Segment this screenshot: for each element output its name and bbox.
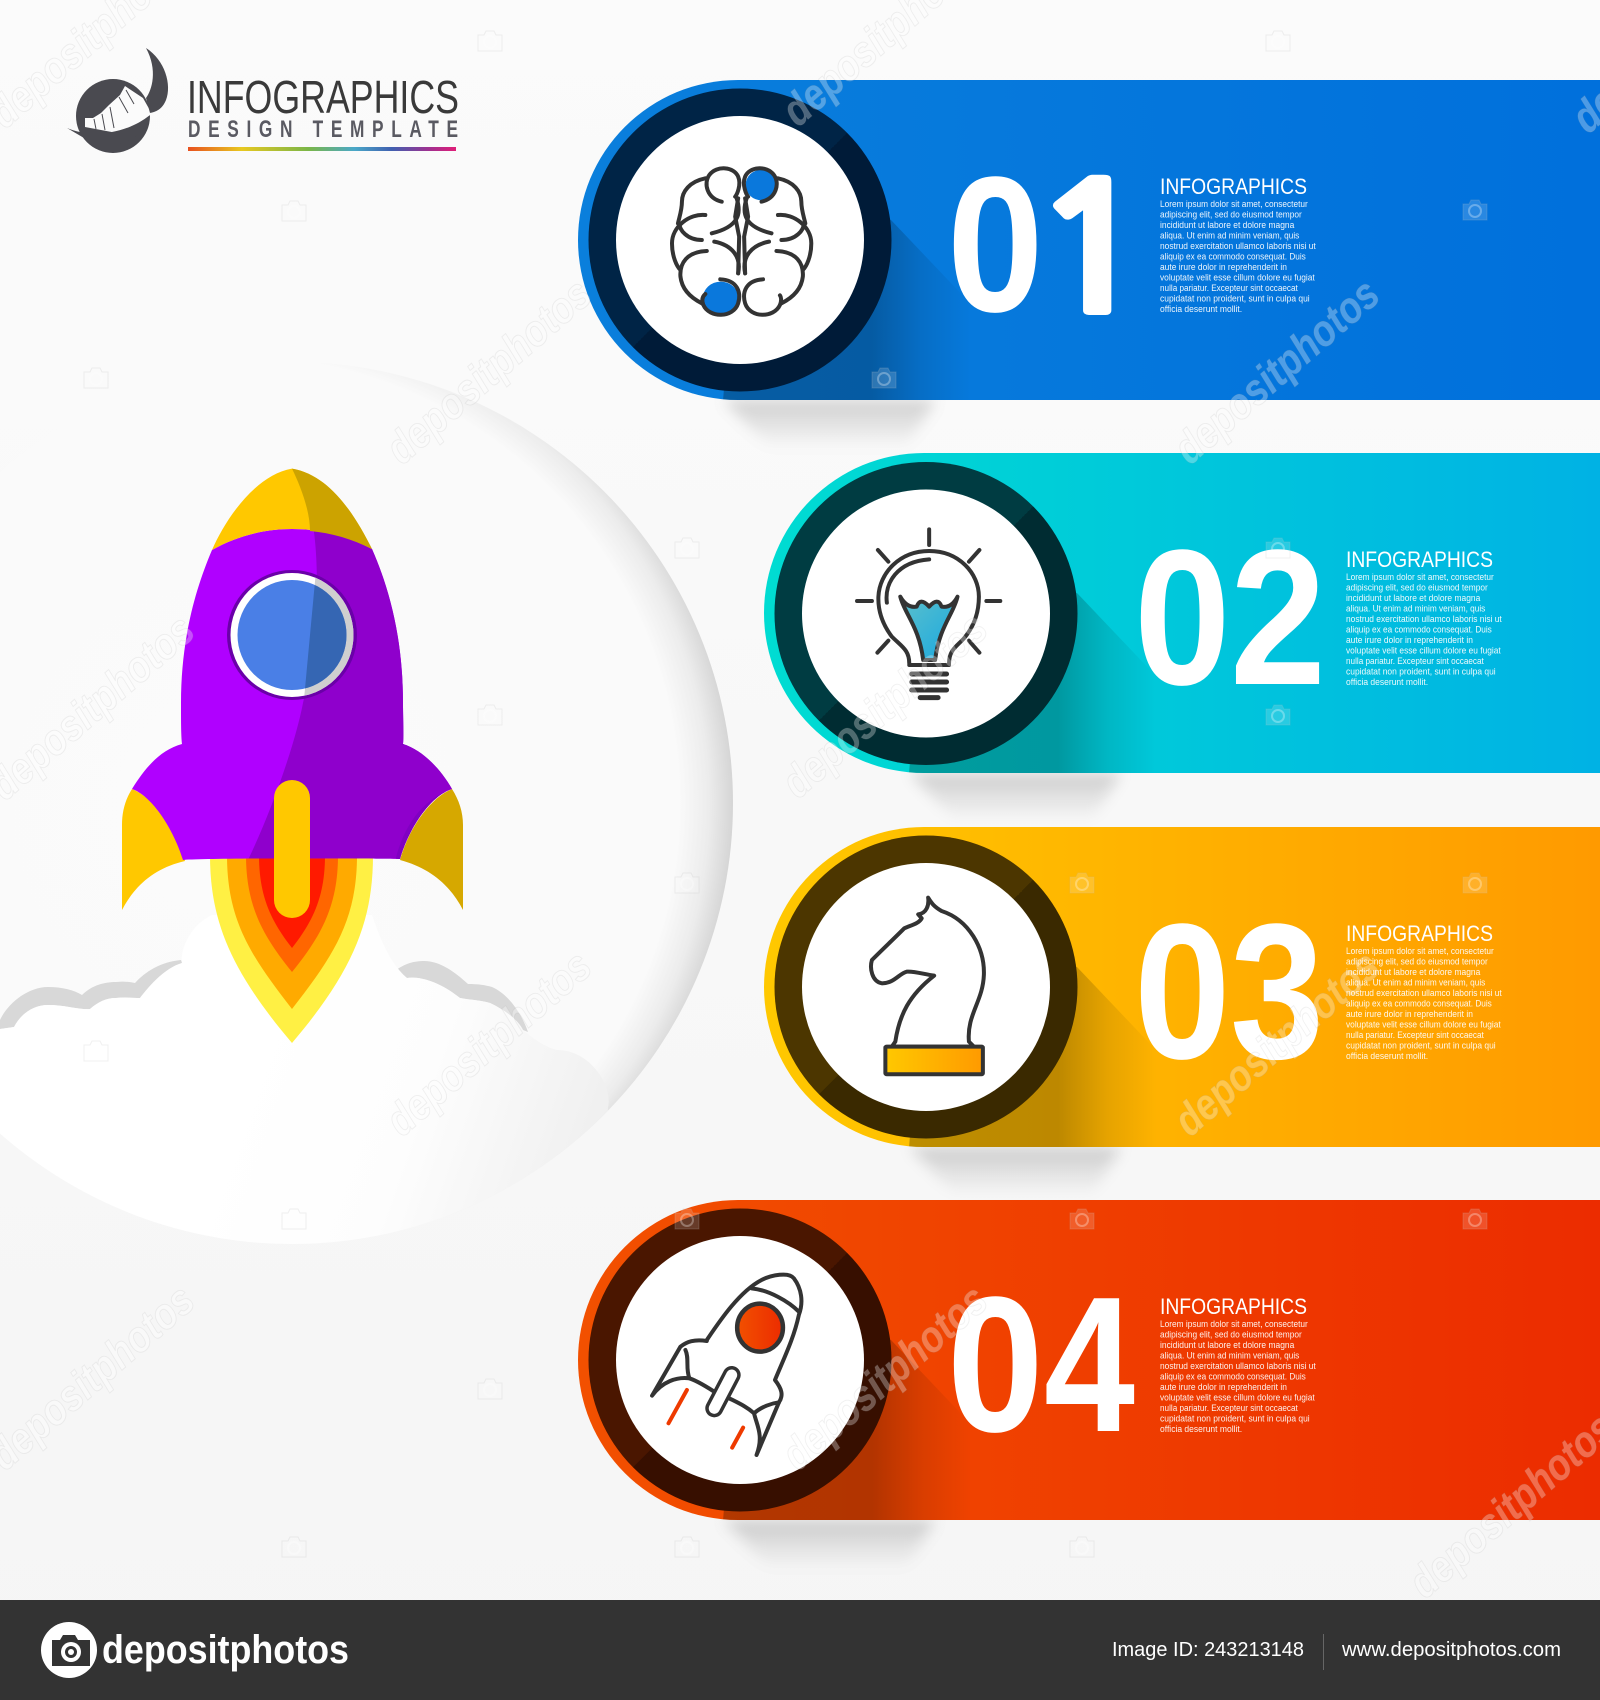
text block 02: adipiscing elit, sed do eiusmod tempor [1346, 582, 1488, 594]
text block 04: aliqua. Ut enim ad minim veniam, quis [1160, 1350, 1299, 1362]
footer wordmark: depositphotos [102, 1628, 349, 1672]
rocket fins [122, 789, 463, 910]
panel: step 03 [764, 827, 1600, 1195]
footer image id: Image ID: 243213148 [1112, 1639, 1304, 1661]
text block 02: nostrud exercitation ullamco laboris nisi ut [1346, 614, 1502, 625]
text block 03: nostrud exercitation ullamco laboris nisi ut [1346, 988, 1502, 999]
text block 03: nulla pariatur. Excepteur sint occaecat [1346, 1030, 1484, 1041]
text block 03: aliqua. Ut enim ad minim veniam, quis [1346, 978, 1485, 988]
panel: large paper circle [0, 362, 733, 1244]
number 04 [947, 1256, 1135, 1472]
text block 01: Lorem ipsum dolor sit amet, consectetur [1160, 199, 1308, 210]
watermarks: depositphotos [376, 941, 601, 1146]
text block 01: adipiscing elit, sed do eiusmod tempor [1160, 210, 1302, 220]
logo subtitle: DESIGN TEMPLATE [188, 116, 458, 143]
text block 01: aliqua. Ut enim ad minim veniam, quis [1160, 230, 1299, 242]
icon: brain [672, 168, 811, 315]
icon: chess knight [871, 898, 984, 1074]
rocket flame [210, 855, 373, 1043]
text block 01: nulla pariatur. Excepteur sint occaecat [1160, 283, 1298, 294]
text block 03: INFOGRAPHICS [1346, 921, 1493, 946]
number 04: 4 [1044, 1256, 1135, 1472]
watermarks: depositphotos [1164, 941, 1389, 1146]
text block 01: incididunt ut labore et dolore magna [1160, 220, 1295, 231]
icon: outline rocket [652, 1275, 801, 1455]
text block 02: aliqua. Ut enim ad minim veniam, quis [1346, 604, 1485, 614]
panel: step 01 [578, 80, 1600, 448]
number 01 [947, 136, 1156, 352]
text block 02: officia deserunt mollit. [1346, 677, 1428, 688]
text block 01: officia deserunt mollit. [1160, 304, 1242, 315]
text block 02: INFOGRAPHICS [1346, 547, 1493, 572]
text block 01: cupidatat non proident, sunt in culpa qui [1160, 294, 1310, 304]
text block 03: aliquip ex ea commodo consequat. Duis [1346, 998, 1492, 1010]
icon: light bulb [857, 529, 1000, 698]
number 02: 0 [1134, 509, 1231, 725]
text block 02: nulla pariatur. Excepteur sint occaecat [1346, 656, 1484, 667]
text block 04: voluptate velit esse cillum dolore eu fugiat [1160, 1392, 1315, 1404]
logo mark [67, 48, 168, 153]
text block 04: aute irure dolor in reprehenderit in [1160, 1382, 1287, 1393]
text block 01: nostrud exercitation ullamco laboris nisi ut [1160, 241, 1316, 252]
text block 02: aliquip ex ea commodo consequat. Duis [1346, 624, 1492, 636]
watermarks: depositphotos [772, 1275, 997, 1480]
rainbow bar [188, 147, 456, 151]
illustration: purple rocket [122, 469, 470, 1043]
footer bar [0, 1600, 1600, 1700]
number 03 [1134, 883, 1324, 1099]
rocket body [132, 520, 470, 862]
text block 02: Lorem ipsum dolor sit amet, consectetur [1346, 572, 1494, 583]
text block 01: aute irure dolor in reprehenderit in [1160, 262, 1287, 273]
rocket thruster tube [274, 780, 310, 918]
text block 02: incididunt ut labore et dolore magna [1346, 593, 1481, 604]
text block 02: cupidatat non proident, sunt in culpa qui [1346, 666, 1496, 678]
text block 03: officia deserunt mollit. [1346, 1051, 1428, 1062]
watermarks: depositphotos [1164, 269, 1389, 474]
rocket nose [212, 469, 372, 550]
logo title: INFOGRAPHICS [187, 71, 459, 123]
number 01: 0 [947, 136, 1044, 352]
text block 04: incididunt ut labore et dolore magna [1160, 1340, 1295, 1351]
number 01: 1 [1029, 162, 1156, 339]
number 03: 3 [1230, 883, 1324, 1099]
text block 01: aliquip ex ea commodo consequat. Duis [1160, 252, 1306, 262]
icon: footer camera logo [41, 1622, 97, 1678]
rocket window [227, 570, 357, 700]
text block 04: aliquip ex ea commodo consequat. Duis [1160, 1372, 1306, 1382]
text block 03: voluptate velit esse cillum dolore eu fugiat [1346, 1020, 1501, 1030]
number 02: 2 [1230, 509, 1326, 725]
text block 01: INFOGRAPHICS [1160, 174, 1307, 199]
watermarks: depositphotos [772, 603, 997, 808]
text block 03 [1346, 921, 1502, 1062]
panel: step 04 [578, 1200, 1600, 1568]
text block 03: Lorem ipsum dolor sit amet, consectetur [1346, 946, 1494, 957]
text block 03: adipiscing elit, sed do eiusmod tempor [1346, 956, 1488, 968]
text block 04: nulla pariatur. Excepteur sint occaecat [1160, 1403, 1298, 1414]
watermarks: depositphotos [376, 269, 601, 474]
text block 03: aute irure dolor in reprehenderit in [1346, 1009, 1473, 1020]
cloud of smoke [0, 960, 608, 1148]
text block 04: Lorem ipsum dolor sit amet, consectetur [1160, 1319, 1308, 1330]
text block 02 [1346, 547, 1502, 688]
text block 01: voluptate velit esse cillum dolore eu fugiat [1160, 272, 1315, 284]
text block 04: nostrud exercitation ullamco laboris nisi ut [1160, 1361, 1316, 1372]
text block 04: cupidatat non proident, sunt in culpa qui [1160, 1414, 1310, 1424]
text block 04: officia deserunt mollit. [1160, 1424, 1242, 1435]
text block 03: incididunt ut labore et dolore magna [1346, 967, 1481, 978]
footer website: www.depositphotos.com [1341, 1639, 1561, 1661]
number 04: 0 [947, 1256, 1044, 1472]
text block 01 [1160, 174, 1316, 315]
text block 03: cupidatat non proident, sunt in culpa qui [1346, 1040, 1496, 1052]
number 03: 0 [1134, 883, 1231, 1099]
text block 02: aute irure dolor in reprehenderit in [1346, 635, 1473, 646]
text block 02: voluptate velit esse cillum dolore eu fugiat [1346, 646, 1501, 656]
panel: step 02 [764, 453, 1600, 821]
header logo [67, 48, 459, 153]
text block 04: INFOGRAPHICS [1160, 1294, 1307, 1319]
text block 04 [1160, 1294, 1316, 1435]
number 02 [1134, 509, 1326, 725]
text block 04: adipiscing elit, sed do eiusmod tempor [1160, 1330, 1302, 1340]
